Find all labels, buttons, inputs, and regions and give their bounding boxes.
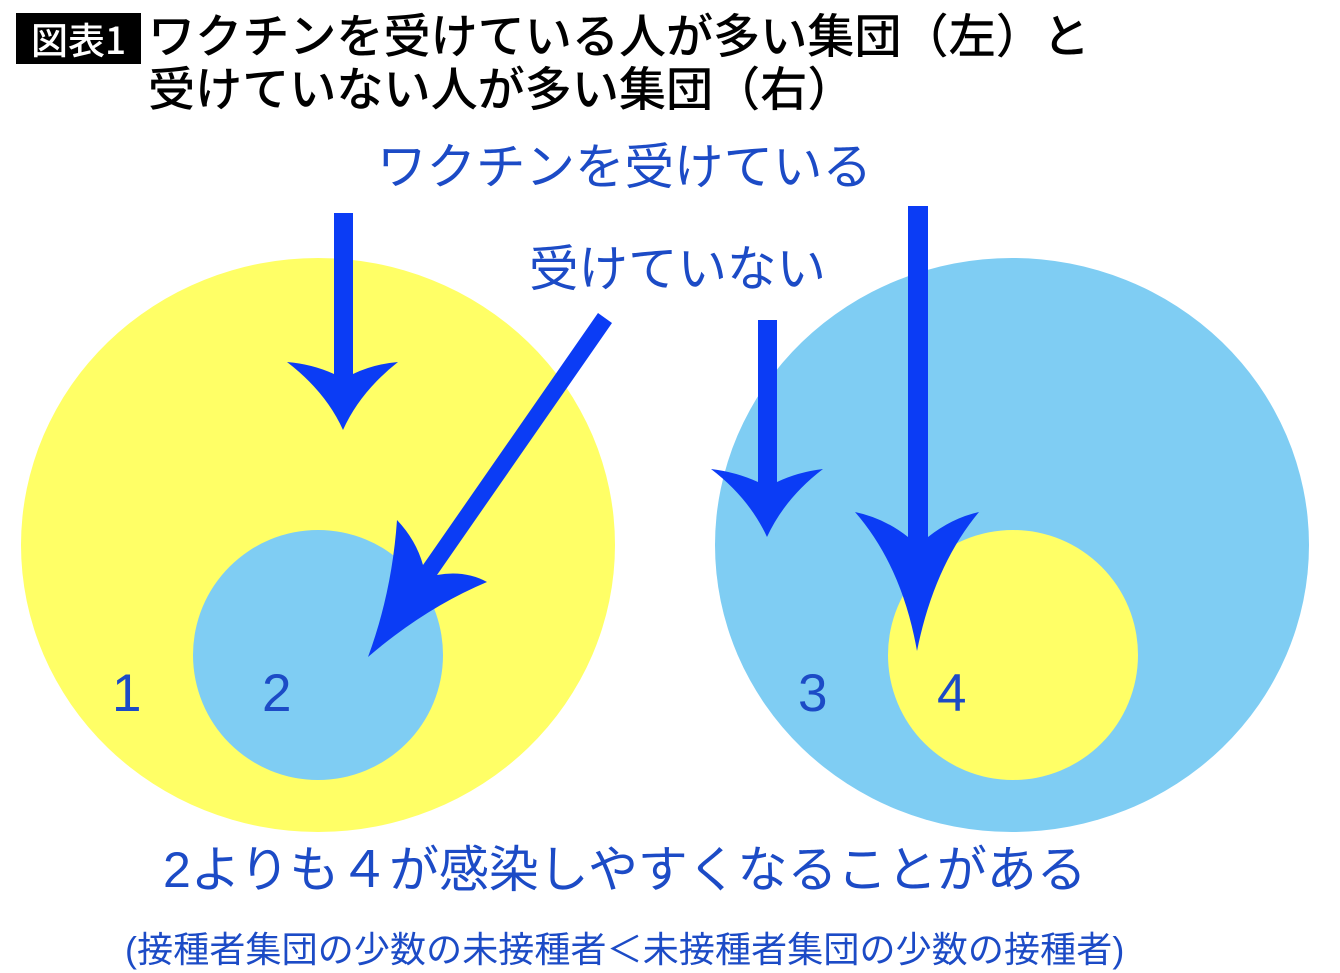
number 4: 4: [937, 664, 966, 723]
footnote: (接種者集団の少数の未接種者＜未接種者集団の少数の接種者): [125, 929, 1124, 970]
title: 受けていない人が多い集団（右）: [148, 63, 854, 116]
figure label: 図表1: [31, 11, 126, 65]
label: vaccinated: ワクチンを受けている: [377, 140, 872, 195]
title: ワクチンを受けている人が多い集団（左）と: [148, 10, 1090, 63]
left inner circle: unvaccinated minority: [193, 530, 443, 780]
arrow: unvaccinated into left inner circle: [368, 313, 612, 657]
label: not vaccinated: 受けていない: [529, 242, 826, 297]
arrow: vaccinated into right inner circle: [855, 206, 979, 651]
left circle: vaccinated majority: [21, 258, 615, 832]
title: [148, 10, 1090, 116]
number 2: 2: [262, 664, 291, 723]
arrow: unvaccinated into right circle: [711, 320, 823, 537]
right circle: unvaccinated majority: [715, 258, 1309, 832]
number 1: 1: [112, 664, 141, 723]
right inner circle: vaccinated minority: [888, 530, 1138, 780]
arrow: vaccinated into left circle: [287, 213, 398, 430]
number 3: 3: [798, 664, 827, 723]
conclusion: 2よりも４が感染しやすくなることがある: [163, 842, 1086, 898]
